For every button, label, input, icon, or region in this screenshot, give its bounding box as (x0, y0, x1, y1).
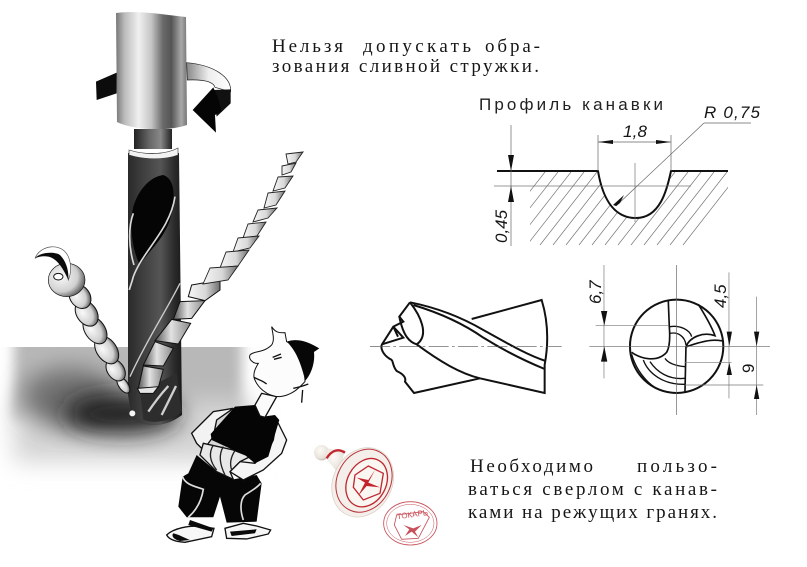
spindle chuck (116, 12, 187, 129)
cartoon boy (167, 327, 319, 542)
end view arrows (601, 311, 759, 399)
profile title: Профиль канавки (479, 95, 663, 114)
shirt and arms (192, 408, 233, 450)
end view labels: 4,5 (711, 284, 730, 308)
chip curl tip (35, 247, 71, 280)
drawing: drill end view (589, 265, 770, 415)
end view flutes (632, 301, 723, 392)
face details (254, 354, 308, 403)
drill neck (134, 129, 172, 149)
caption: groove requirement (468, 456, 717, 523)
rubber stamp (314, 437, 405, 528)
heading: chip warning: Нельзя (272, 36, 343, 57)
caption: groove requirement: ваться сверлом с канав- (468, 479, 717, 500)
end view labels: 6,7 (586, 280, 605, 304)
dimension lines (511, 123, 751, 246)
rotation arrow (96, 63, 231, 133)
chips wrapped on drill (129, 280, 220, 422)
hatching (530, 172, 728, 246)
end view labels (586, 280, 758, 373)
stamp imprint (384, 502, 437, 545)
caption: groove requirement: ками на режущих гранях. (468, 502, 717, 523)
cap (287, 340, 319, 381)
vest (211, 405, 279, 463)
head (250, 327, 305, 397)
flute (131, 175, 174, 265)
dimension labels: 0,45 (492, 209, 511, 243)
caption: groove requirement: Необходимо (470, 456, 593, 477)
heading: chip warning (272, 36, 540, 77)
heading: chip warning: обра- (485, 36, 540, 57)
left chip coil (35, 247, 132, 395)
shoes (167, 526, 214, 542)
illustration: drill in workpiece with chips (35, 12, 303, 425)
caption: groove requirement: пользо- (637, 456, 717, 477)
heading: chip warning: допускать (363, 36, 471, 57)
right chip spiral (203, 152, 303, 284)
belly (200, 443, 250, 479)
dimension labels: 1,8 (623, 122, 648, 141)
center lines (494, 163, 691, 222)
drawing: flute profile (479, 95, 761, 246)
collar (129, 148, 178, 159)
dimension labels: R 0,75 (704, 103, 761, 122)
dimension arrows (508, 140, 671, 206)
end view labels: 9 (739, 364, 758, 373)
neck (255, 393, 277, 417)
heading: chip warning: зования сливной стружки. (272, 56, 539, 77)
stamp imprint: ТОКАРЬ (396, 508, 429, 521)
pants (178, 455, 262, 523)
end view axes (589, 265, 770, 415)
groove outline (497, 171, 728, 218)
dimension labels (492, 103, 761, 243)
drawing: drill side view (370, 300, 562, 393)
drill body (128, 153, 182, 425)
floor shadow (14, 330, 254, 462)
